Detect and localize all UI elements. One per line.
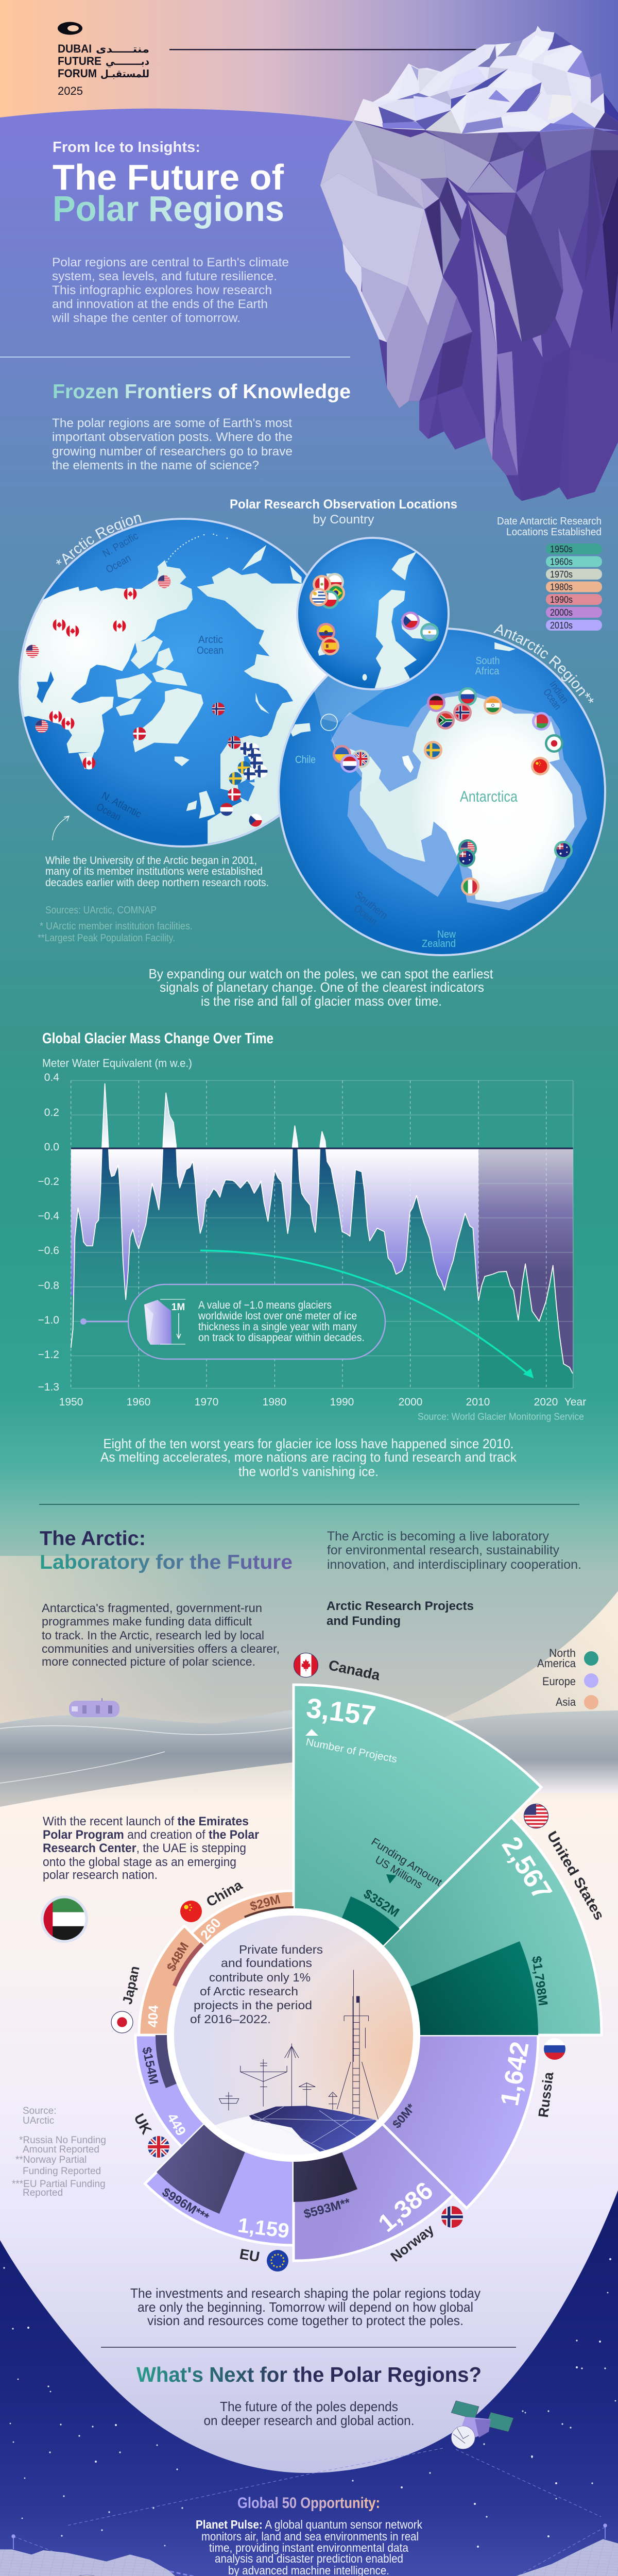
map sources	[38, 905, 193, 944]
map sources: Sources: UArctic, COMNAP	[45, 905, 157, 916]
EU bar labels	[160, 2185, 290, 2272]
callout: -1.0 value explainer: thickness in a single year with many	[198, 1321, 357, 1333]
signal line to sensor	[170, 2571, 518, 2576]
frozen frontiers text: important observation posts. Where do the	[52, 430, 293, 444]
decade legend: 1980s	[550, 582, 573, 592]
Planet Pulse text: time, providing instant environmental data	[209, 2541, 408, 2554]
Antarctic map	[279, 629, 605, 955]
x axis labels	[59, 1396, 586, 1408]
decade legend: 2000s	[550, 607, 573, 618]
intro text: will shape the center of tomorrow.	[52, 311, 241, 325]
what's next text: on deeper research and global action.	[204, 2413, 414, 2428]
map sources: * UArctic member institution facilities.	[40, 921, 193, 932]
chart heading: and Funding	[327, 1614, 401, 1628]
Canada bar labels: US Millions	[373, 1854, 424, 1891]
decade legend	[497, 516, 602, 631]
funding sources: Reported	[23, 2188, 63, 2198]
map title: Polar Research Observation Locations	[230, 497, 457, 512]
y axis labels: −0.8	[38, 1280, 59, 1292]
logo: Dubai Future Forum: FUTURE	[58, 55, 101, 67]
China bar labels	[180, 1877, 282, 1943]
arrow: Arctic note	[53, 816, 69, 840]
funding sources	[12, 2106, 106, 2198]
frozen frontiers text	[52, 416, 293, 472]
decade legend: 1950s	[550, 544, 573, 554]
x axis labels: 2010	[466, 1396, 490, 1408]
UAE polar text	[43, 1815, 259, 1882]
UAE polar text: Research Center, the UAE is stepping	[43, 1841, 246, 1855]
Russia bar labels: 1,642	[495, 2040, 535, 2108]
Antarctic labels: Chile	[295, 754, 316, 766]
illustration: research station	[54, 2575, 201, 2576]
Norway bar labels: 1,386	[373, 2177, 438, 2238]
Arctic intro text: innovation, and interdisciplinary cooperation.	[327, 1557, 581, 1572]
decade legend: 1960s	[550, 556, 573, 567]
centre illustration	[167, 1908, 420, 2162]
Canada bar labels: Canada	[327, 1657, 382, 1683]
EU bar labels: 1,159	[236, 2214, 290, 2243]
Russia bar labels: Russia	[536, 2071, 556, 2119]
Antarctic labels: Ocean	[352, 903, 379, 927]
logo: Dubai Future Forum: DUBAI	[58, 42, 92, 55]
logo: Dubai Future Forum: دبــــــــي	[106, 56, 149, 68]
Antarctica vs Arctic text: to track. In the Arctic, research led by local	[42, 1629, 264, 1642]
Arctic region label: *Arctic Region	[56, 515, 142, 565]
bridge text: glacier: signals of planetary change. One of the clearest indicators	[160, 979, 484, 995]
funding sources: UArctic	[23, 2115, 54, 2126]
chart axis title: Meter Water Equivalent (m w.e.)	[42, 1057, 192, 1070]
bridge text: glacier: By expanding our watch on the poles, we can spot the earliest	[148, 966, 493, 981]
Norway bar labels: Norway	[388, 2222, 437, 2265]
bridge text: funding: Eight of the ten worst years for glacier ice loss have happened since 2010.	[103, 1436, 514, 1451]
centre text: projects in the period	[194, 1998, 312, 2012]
Planet Pulse text: Planet Pulse: A global quantum sensor network	[196, 2518, 422, 2531]
Canada bar labels: Number of Projects	[305, 1736, 398, 1765]
intro title	[53, 139, 284, 229]
Arctic map	[15, 519, 350, 850]
Antarctic labels: Ocean	[541, 687, 563, 712]
Russia bar labels	[390, 2038, 565, 2131]
Norway bar labels: $593M**	[302, 2196, 352, 2222]
EU bar labels: EU	[238, 2246, 261, 2265]
inset flags	[310, 573, 439, 655]
UAE polar text: Polar Program and creation of the Polar	[43, 1828, 259, 1842]
region legend: Europe	[542, 1675, 576, 1688]
starry sky	[0, 2112, 618, 2576]
map title: by Country	[313, 513, 374, 527]
Arctic intro text: for environmental research, sustainability	[327, 1543, 559, 1557]
what's next text: The future of the poles depends	[220, 2399, 398, 2414]
intro title: The Future of	[53, 157, 284, 197]
callout: -1.0 value explainer: A value of −1.0 means glaciers	[198, 1299, 332, 1311]
Arctic note text	[45, 855, 269, 889]
Arctic labels: Ocean	[95, 801, 123, 823]
Arctic labels: N. Atlantic	[100, 790, 143, 820]
heading: The Arctic: The Arctic:	[40, 1528, 146, 1550]
UAE polar text: onto the global stage as an emerging	[43, 1855, 236, 1869]
y axis labels: −1.2	[38, 1349, 59, 1361]
centre text: contribute only 1%	[209, 1971, 311, 1984]
x axis labels: 1950	[59, 1396, 83, 1408]
UK bar labels: UK	[131, 2111, 155, 2137]
bridge text: next: vision and resources come together to protect the poles.	[147, 2313, 464, 2328]
funding sources: ***EU Partial Funding	[12, 2179, 106, 2190]
funding wedges	[156, 1896, 538, 2214]
Antarctic labels: Indian	[547, 679, 571, 706]
callout: -1.0 value explainer	[80, 1284, 385, 1359]
intro text: Polar regions are central to Earth's climate	[52, 256, 289, 269]
small locator circle	[321, 714, 337, 731]
funding sources: Amount Reported	[23, 2144, 99, 2155]
intro text: This infographic explores how research	[52, 283, 272, 297]
UAE polar text: With the recent launch of the Emirates	[43, 1815, 249, 1828]
Antarctica vs Arctic text: more connected picture of polar science.	[42, 1655, 255, 1668]
sensor pins on peaks	[12, 2524, 607, 2549]
intro text: system, sea levels, and future resilience.	[52, 269, 277, 283]
intro text	[52, 256, 289, 325]
polar bar chart: Arctic projects and funding	[111, 1653, 607, 2272]
heading: What's next: What's Next for the Polar Regions?	[136, 2363, 482, 2386]
Arctic labels	[95, 530, 224, 823]
decade legend: 1990s	[550, 595, 573, 605]
EU bar labels: $996M***	[160, 2185, 212, 2225]
centre text: Private funders	[239, 1943, 323, 1956]
glacier mass line chart	[38, 1072, 586, 1408]
mountains with mesh	[0, 2539, 618, 2576]
China bar labels: 260	[197, 1915, 224, 1943]
China bar labels: $29M	[249, 1892, 282, 1914]
UAE polar text: polar research nation.	[43, 1868, 158, 1882]
United States bar labels: $1,798M	[529, 1955, 551, 2007]
bridge text: funding	[100, 1436, 517, 1479]
x axis labels: 2020	[534, 1396, 558, 1408]
Antarctica vs Arctic text: Antarctica's fragmented, government-run	[42, 1601, 262, 1615]
map sources: **Largest Peak Population Facility.	[38, 933, 175, 944]
x axis labels: Year	[564, 1396, 586, 1408]
bridge text: next: The investments and research shaping the polar regions today	[130, 2285, 480, 2301]
y axis labels: 0.4	[44, 1072, 59, 1083]
United States bar labels: United States	[544, 1828, 607, 1923]
centre text: and foundations	[221, 1956, 312, 1970]
Planet Pulse text: analysis and disaster prediction enabled	[215, 2552, 403, 2565]
icon: UAE flag	[41, 1895, 88, 1943]
Antarctic labels: South	[476, 655, 500, 667]
purple wave	[0, 109, 618, 144]
bridge text: glacier	[148, 966, 493, 1009]
heading: The Arctic: Laboratory for the Future	[40, 1551, 293, 1573]
icon: ice block	[144, 1299, 185, 1345]
frozen frontiers text: The polar regions are some of Earth's most	[52, 416, 292, 430]
Antarctica vs Arctic text: programmes make funding data difficult	[42, 1615, 252, 1628]
Japan bar labels: $48M	[164, 1940, 192, 1974]
x axis labels: 2000	[399, 1396, 422, 1408]
y axis labels: 0.2	[44, 1107, 59, 1118]
logo: Dubai Future Forum	[58, 22, 149, 97]
frozen frontiers text: the elements in the name of science?	[52, 459, 259, 472]
region legend	[537, 1647, 598, 1709]
intro text: and innovation at the ends of the Earth	[52, 297, 268, 311]
Planet Pulse text: monitors air, land and sea environments in real	[201, 2530, 419, 2543]
decade legend: 1970s	[550, 569, 573, 580]
Antarctic labels: Southern	[353, 889, 390, 922]
funding sources: **Norway Partial	[15, 2155, 87, 2165]
inset map: Antarctic Peninsula	[297, 538, 449, 698]
icon: satellite	[451, 2401, 513, 2449]
intro title: Polar Regions	[53, 189, 284, 229]
Antarctic labels: New	[437, 929, 456, 940]
Canada bar labels	[294, 1653, 444, 1920]
Arctic intro text	[327, 1529, 581, 1572]
dunes	[0, 1709, 618, 1807]
logo: Dubai Future Forum: منتـــــدى	[96, 44, 149, 55]
region legend: America	[537, 1657, 576, 1670]
x axis labels: 1980	[263, 1396, 286, 1408]
Antarctic flags	[333, 687, 573, 896]
Japan bar labels	[111, 1940, 192, 2033]
Japan bar labels: Japan	[119, 1964, 143, 2006]
y axis labels: −0.2	[38, 1176, 59, 1188]
Arctic labels: N. Pacific	[101, 530, 140, 560]
Canada bar labels: 3,157	[304, 1692, 377, 1732]
centre text	[190, 1943, 323, 2026]
region legend: North	[549, 1647, 576, 1659]
United States bar labels: 2,567	[496, 1832, 558, 1906]
UK bar labels	[131, 2046, 189, 2158]
decade legend: 2010s	[550, 620, 573, 631]
Planet Pulse text	[196, 2518, 422, 2576]
Norway bar labels	[302, 2177, 463, 2265]
Antarctic labels: Africa	[475, 666, 500, 677]
Antarctica vs Arctic text: communities and universities offers a clearer,	[42, 1642, 280, 1655]
funding sources: Source:	[23, 2106, 56, 2116]
callout: -1.0 value explainer: worldwide lost over one meter of ice	[198, 1310, 357, 1322]
Arctic labels: Arctic	[198, 634, 223, 646]
logo: Dubai Future Forum: 2025	[58, 84, 83, 97]
y axis labels: 0.0	[44, 1141, 59, 1153]
icon: ice block: 1M	[171, 1302, 185, 1313]
bridge text: next: are only the beginning. Tomorrow will depend on how global	[138, 2299, 473, 2315]
cream mountain	[412, 1591, 618, 1762]
centre text: of Arctic research	[200, 1985, 298, 1998]
y axis labels: −0.6	[38, 1245, 59, 1257]
what's next text	[204, 2399, 414, 2428]
icon: research hut	[69, 1698, 119, 1717]
United States bar labels	[496, 1804, 607, 2007]
heading: Frozen Frontiers: Frozen Frontiers of Knowledge	[53, 381, 351, 403]
x axis labels: 1960	[127, 1396, 150, 1408]
header gradient band	[0, 0, 618, 129]
frozen frontiers text: growing number of researchers go to brave	[52, 445, 293, 459]
region legend: Asia	[556, 1696, 576, 1708]
x axis labels: 1990	[330, 1396, 354, 1408]
intro title: From Ice to Insights:	[53, 139, 200, 156]
x axis labels: 1970	[195, 1396, 218, 1408]
Arctic labels: Ocean	[197, 645, 224, 656]
left peach glow	[0, 1556, 216, 1726]
Arctic flags	[26, 575, 268, 826]
y axis labels: −1.3	[38, 1381, 59, 1393]
Antarctic labels: Zealand	[422, 938, 456, 950]
funding sources: *Russia No Funding	[19, 2135, 106, 2146]
Antarctic labels	[295, 655, 571, 950]
Russia bar labels: $0M*	[390, 2101, 418, 2131]
UK bar labels: 449	[164, 2110, 189, 2139]
UK bar labels: $154M	[140, 2046, 161, 2086]
logo: Dubai Future Forum: FORUM	[58, 67, 97, 80]
chart source: Source: World Glacier Monitoring Service	[418, 1412, 584, 1422]
Arctic labels: Ocean	[104, 552, 133, 575]
Canada bar labels: $352M	[361, 1887, 402, 1920]
Arctic note text: While the University of the Arctic began in 2001,	[45, 855, 257, 867]
y axis labels	[38, 1072, 59, 1393]
Arctic note text: decades earlier with deep northern research roots.	[45, 877, 269, 889]
chart title: Global Glacier Mass Change Over Time	[42, 1030, 273, 1047]
Arctic intro text: The Arctic is becoming a live laboratory	[327, 1529, 549, 1544]
Canada bar labels: Funding Amount	[369, 1836, 444, 1889]
heading: The Arctic	[40, 1528, 293, 1573]
bridge text: funding: the world's vanishing ice.	[238, 1464, 379, 1479]
chart heading: Arctic Research Projects	[327, 1599, 474, 1613]
chart heading	[327, 1599, 474, 1628]
bridge text: next	[130, 2285, 480, 2328]
Antarctic region label: Antarctic Region**	[493, 624, 593, 703]
Antarctic labels: Antarctica	[460, 788, 518, 805]
Arctic note text: many of its member institutions were established	[45, 866, 263, 877]
map title	[230, 497, 457, 527]
bridge text: funding: As melting accelerates, more nations are racing to fund research and track	[100, 1449, 517, 1465]
funding sources: Funding Reported	[23, 2166, 101, 2177]
bridge text: glacier: is the rise and fall of glacier mass over time.	[201, 993, 442, 1009]
y axis labels: −0.4	[38, 1210, 59, 1222]
Japan bar labels: 404	[145, 2005, 161, 2028]
China bar labels: China	[204, 1877, 245, 1910]
decade legend: Locations Established	[506, 527, 602, 538]
centre text: of 2016–2022.	[190, 2012, 271, 2026]
decade legend: Date Antarctic Research	[497, 516, 602, 527]
logo: Dubai Future Forum: للمستقبـل	[100, 69, 149, 80]
Antarctica vs Arctic text	[42, 1601, 280, 1668]
iceberg illustration	[320, 26, 618, 501]
signal lines	[13, 2448, 605, 2576]
large light oval	[0, 2112, 618, 2473]
Global 50 heading: Global 50 Opportunity:	[237, 2495, 380, 2512]
y axis labels: −1.0	[38, 1314, 59, 1326]
beam between maps	[306, 662, 407, 723]
callout: -1.0 value explainer: on track to disappear within decades.	[198, 1332, 365, 1344]
